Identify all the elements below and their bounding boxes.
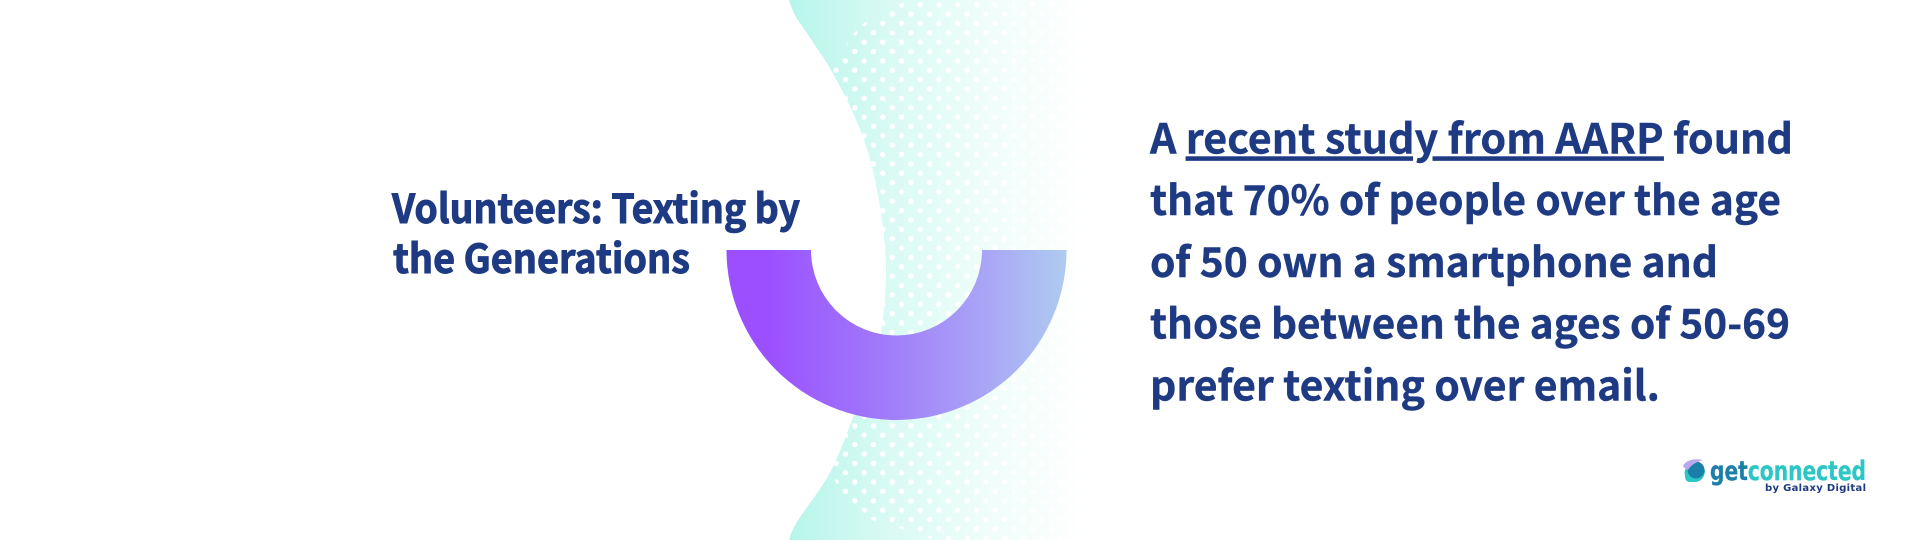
body paragraph [1149, 106, 1793, 412]
body paragraph: prefer texting over email. [1150, 352, 1660, 412]
heading: the Generations [393, 227, 690, 285]
body paragraph: those between the ages of 50-69 [1150, 290, 1790, 350]
body paragraph: that 70% of people over the age [1150, 167, 1781, 227]
body paragraph: A recent study from AARP found [1149, 106, 1793, 166]
mint blob with dot pattern [789, 0, 1034, 540]
logo: getconnected by Galaxy Digital [1683, 456, 1866, 494]
body paragraph: of 50 own a smartphone and [1150, 229, 1718, 289]
heading [391, 177, 800, 285]
heading: Volunteers: Texting by [391, 177, 800, 235]
purple half ring [726, 250, 1066, 420]
icon: logo mark [1683, 459, 1705, 482]
tagline: by Galaxy Digital [1765, 483, 1866, 494]
wordmark: getconnected [1710, 456, 1866, 487]
